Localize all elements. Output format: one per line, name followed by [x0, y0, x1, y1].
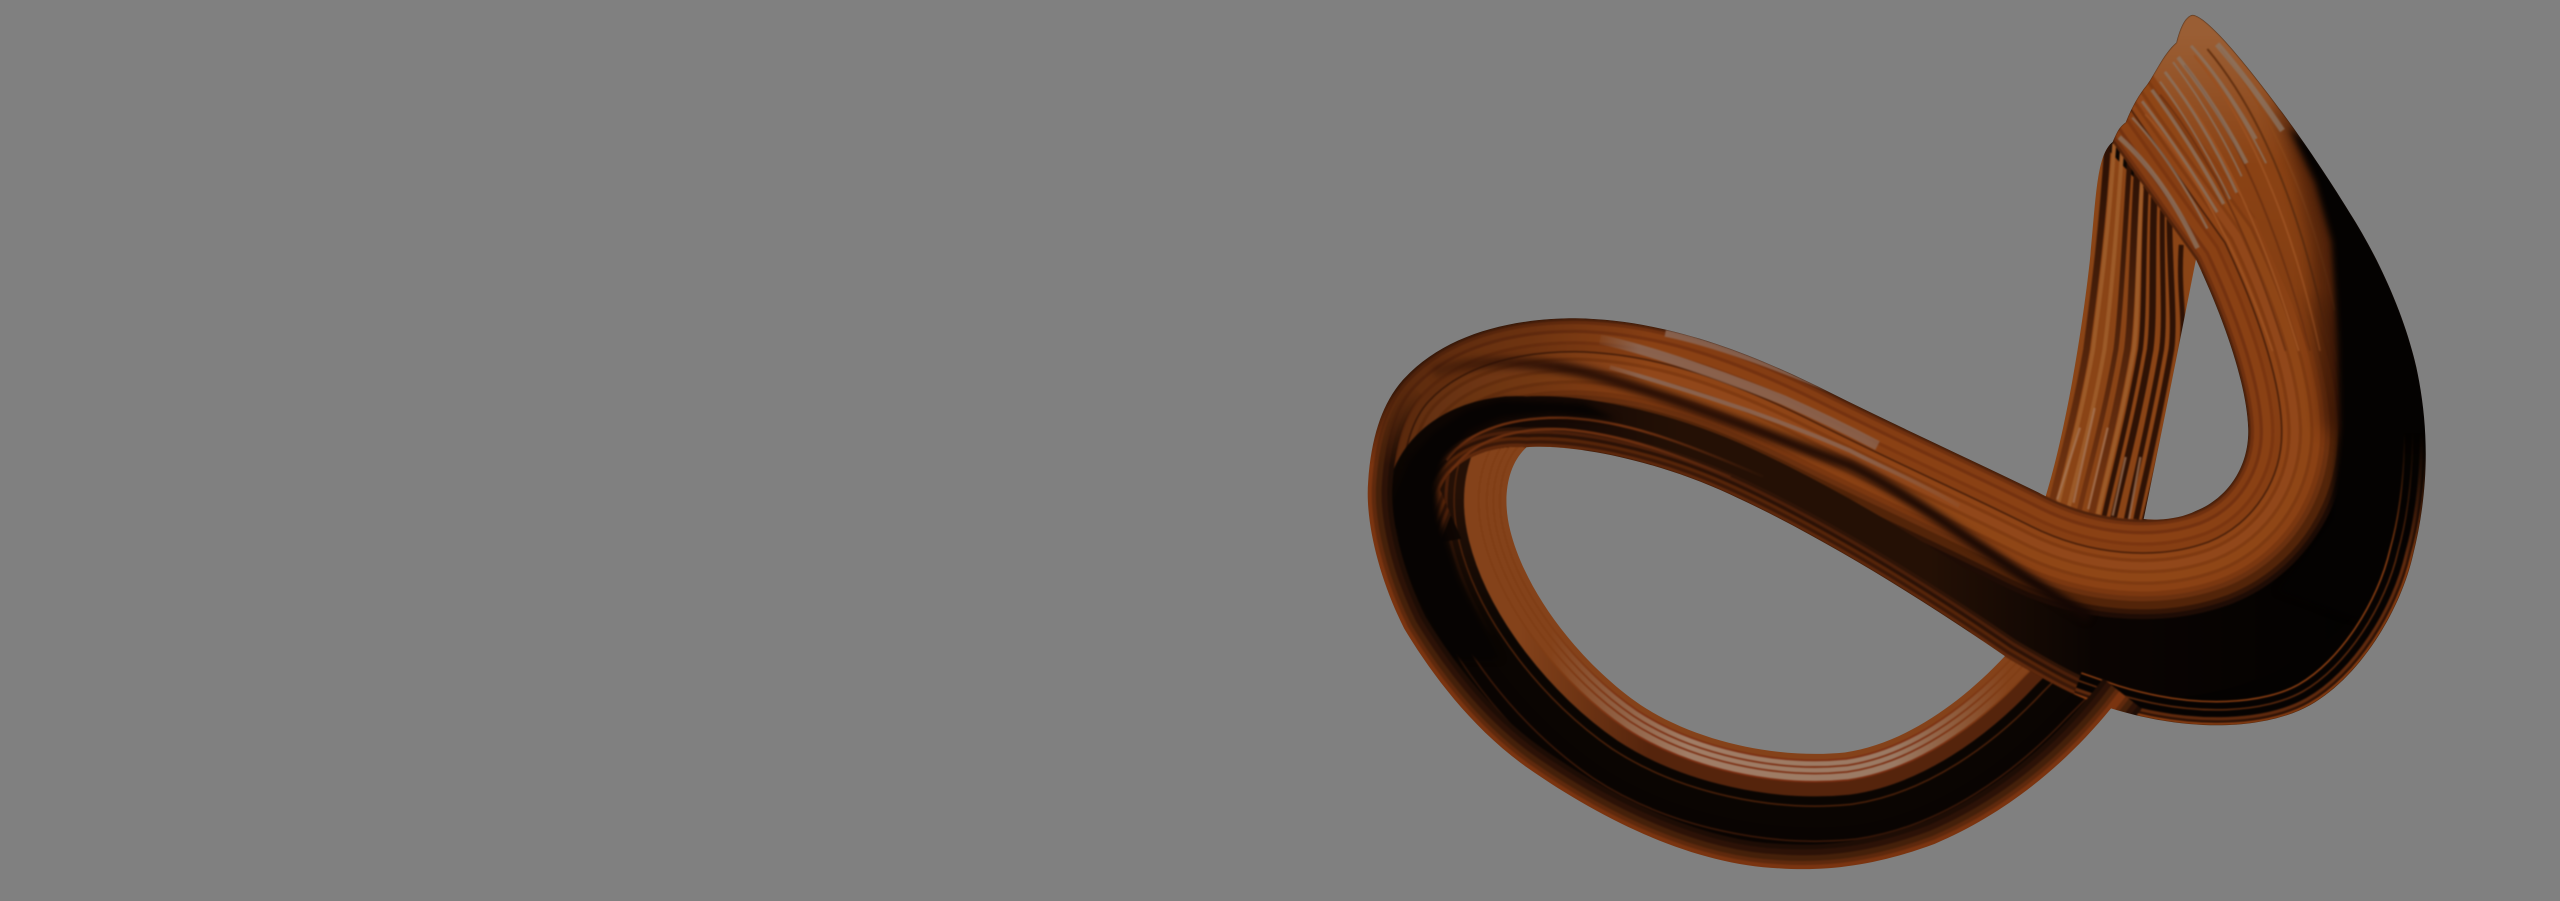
fine copper strands at the tip	[2145, 49, 2335, 351]
pale streaks on the diagonal	[1600, 333, 1959, 506]
base dark body	[1373, 14, 2426, 726]
black crescent on the left of the loop	[1391, 400, 1616, 659]
lower right rim	[2074, 445, 2426, 726]
copper wash at the tip	[2153, 14, 2338, 372]
left dimming	[1376, 319, 1614, 468]
ribbon	[1339, 0, 2449, 901]
lower edge of diagonal	[1420, 418, 2155, 721]
lower loop inner orange band	[1506, 421, 2060, 754]
pale streaks at the tip	[2119, 44, 2282, 248]
lower loop outer rim	[1368, 379, 2122, 869]
artwork: twisted copper ribbon on grey background	[1368, 14, 2426, 870]
dark streaks across the diagonal	[1433, 363, 2090, 617]
black wedge on the right outer edge	[2288, 126, 2426, 506]
front sweep: tip, right loop, diagonal and upper-left arc	[1372, 14, 2426, 726]
offset colour bands	[1368, 85, 2248, 539]
rear vertical strands	[2038, 139, 2204, 530]
soft brown transition before the black edge	[2270, 100, 2338, 435]
